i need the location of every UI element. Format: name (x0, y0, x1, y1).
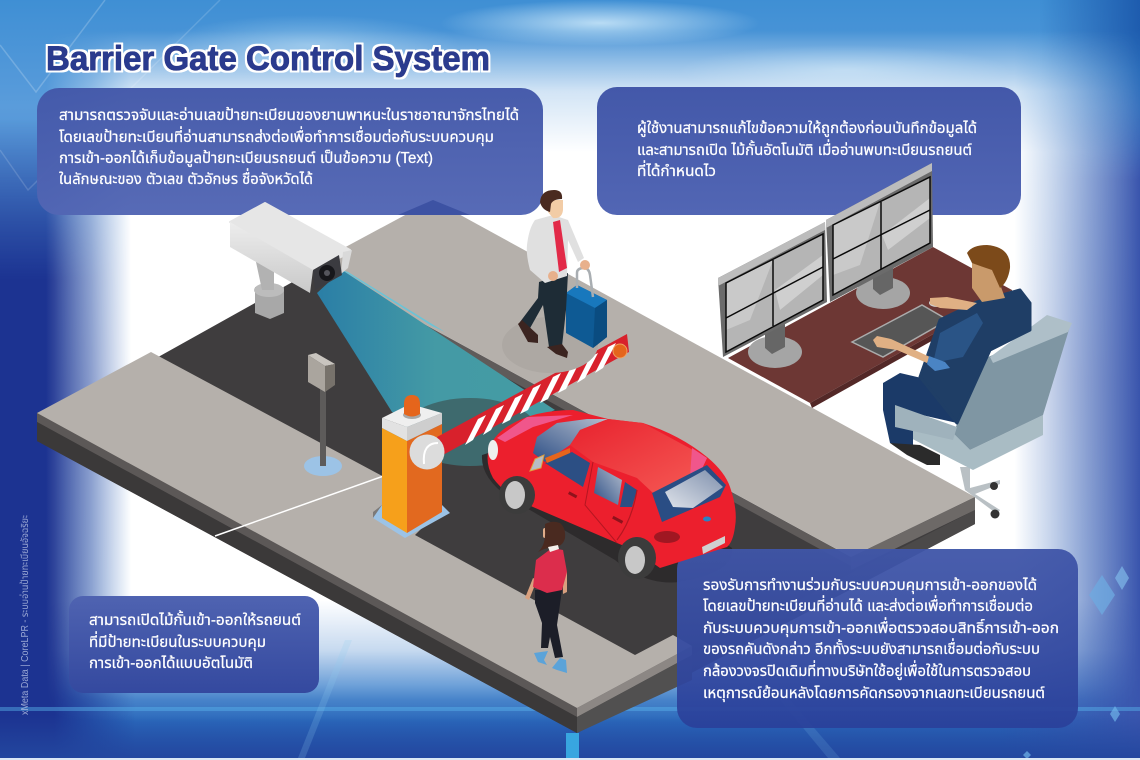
panel: operator description: และสามารถเปิด ไม้กั้นอัตโนมัติ เมื่ออ่านพบทะเบียนรถยนต์ (637, 139, 972, 159)
road platform (37, 270, 975, 733)
title: Barrier Gate Control System (46, 40, 490, 78)
panel: operator description: ผู้ใช้งานสามารถแก้ไขข้อความให้ถูกต้องก่อนบันทึกข้อมูลได้ (637, 119, 977, 137)
icon: monitoring workstation (718, 163, 1072, 518)
panel: operator description: ที่ได้กำหนดไว (637, 160, 716, 180)
icon: security camera (230, 203, 352, 319)
panel: automatic opening description: การเข้า-ออกได้แบบอัตโนมัติ (89, 655, 253, 672)
panel: integration description (677, 549, 1078, 728)
panel: integration description: กับระบบควบคุมการเข้า-ออกเพื่อตรวจสอบสิทธิ์การเข้า-ออก (703, 617, 1059, 637)
far sidewalk (314, 200, 975, 570)
panel: automatic opening description (69, 596, 319, 693)
panel: integration description: กล้องวงจรปิดเดิมที่ทางบริษัทใช้อยู่เพื่อใช้ในการตรวจสอบ (703, 660, 1031, 680)
icon: sensor post (304, 353, 342, 476)
panel: plate recognition description: การเข้า-ออกได้เก็บข้อมูลป้ายทะเบียนรถยนต์ เป็นข้อความ (Text) (59, 149, 433, 167)
panel: operator description (597, 87, 1021, 215)
barrier gate (373, 334, 629, 538)
panel: plate recognition description: สามารถตรวจจับและอ่านเลขป้ายทะเบียนของยานพาหนะในราชอาณาจักรไทยได้ (59, 106, 519, 124)
icon: red car (488, 410, 736, 579)
icon: woman walking (525, 522, 567, 673)
panel: automatic opening description: สามารถเปิดไม้กั้นเข้า-ออกให้รถยนต์ (89, 610, 301, 629)
panel: integration description: รองรับการทำงานร่วมกับระบบควบคุมการเข้า-ออกของได้ (703, 576, 1037, 594)
panel: plate recognition description (37, 88, 543, 215)
connector line (215, 462, 423, 536)
panel: automatic opening description: ที่มีป้ายทะเบียนในระบบควบคุม (89, 631, 266, 651)
camera beam (317, 270, 555, 466)
panel: integration description: เหตุการณ์ย้อนหลังโดยการคัดกรองจากเลขทะเบียนรถยนต์ (703, 685, 1045, 702)
vertical credit text: xMeta Data | CoreLPR - ระบบอ่านป้ายทะเบียนอัจฉริยะ (18, 515, 31, 715)
car shadow (482, 430, 732, 582)
panel: integration description: ของรถคันดังกล่าว อีกทั้งระบบยังสามารถเชื่อมต่อกับระบบ (703, 638, 1040, 658)
icon: traveller with suitcase (502, 190, 607, 373)
panel: integration description: โดยเลขป้ายทะเบียนที่อ่านได้ และส่งต่อเพื่อทำการเชื่อมต่อ (703, 595, 1033, 615)
near sidewalk (37, 352, 692, 733)
panel: plate recognition description: ในลักษณะของ ตัวเลข ตัวอักษร ชื่อจังหวัดได้ (59, 168, 313, 188)
panel: plate recognition description: โดยเลขป้ายทะเบียนที่อ่านสามารถส่งต่อเพื่อทำการเชื่อมต่อกับระบบควบคุม (59, 126, 494, 146)
